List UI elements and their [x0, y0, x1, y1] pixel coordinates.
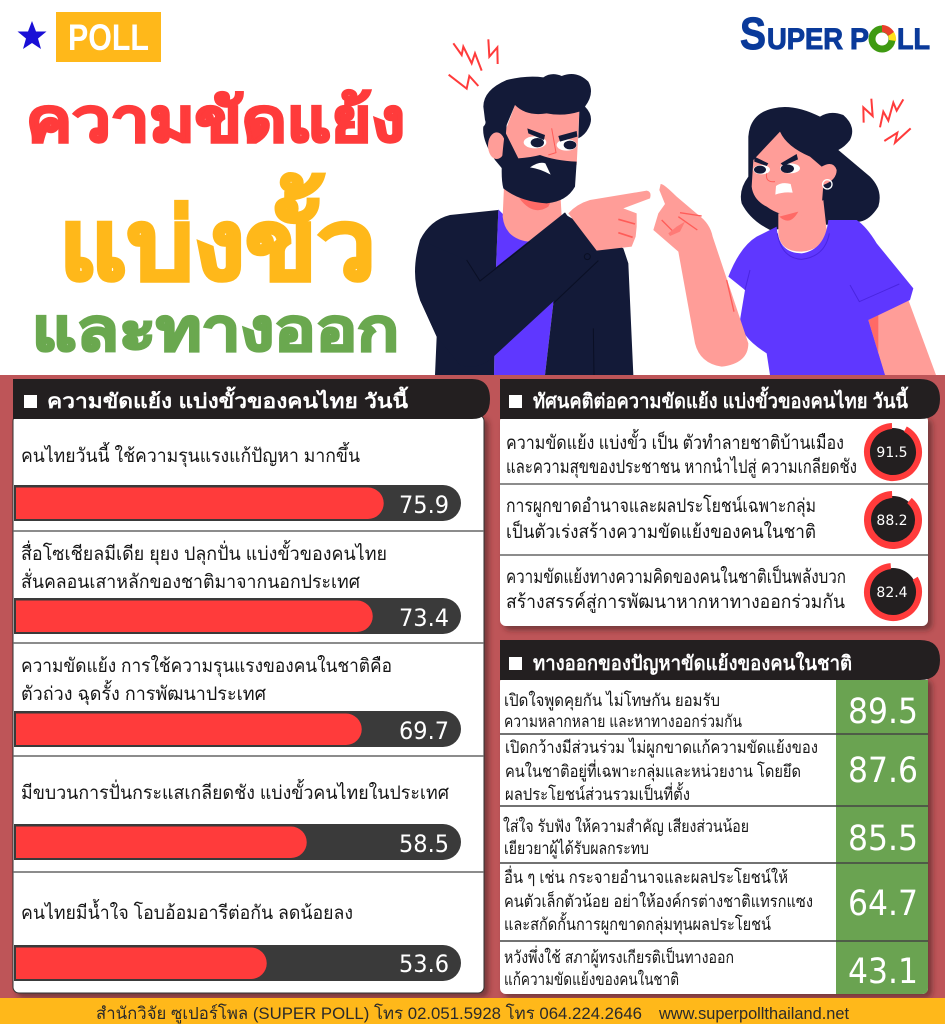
- badge: star and POLL: POLL: [68, 17, 149, 58]
- row: 43.1: แก้ความขัดแย้งของคนในชาติ: [504, 969, 679, 989]
- heading: left panel: ความขัดแย้ง แบ่งขั้วของคนไทย วันนี้: [47, 386, 409, 413]
- panel: ways out: [500, 640, 940, 994]
- row: 91.5: [506, 416, 929, 488]
- row: 88.2: การผูกขาดอำนาจและผลประโยชน์เฉพาะกลุ่ม: [506, 494, 816, 518]
- row: kindness declining 53.6: 53.6: [399, 950, 449, 978]
- row: violence 75.9: 75.9: [399, 491, 449, 519]
- title: แบ่งขั้ว: [59, 173, 376, 300]
- row: drag on development 69.7: ความขัดแย้ง การใช้ความรุนแรงของคนในชาติคือ: [21, 655, 392, 678]
- row: 64.7: และสกัดกั้นการผูกขาดกลุ่มทุนผลประโยชน์: [504, 912, 771, 935]
- title: และทางออก: [32, 298, 399, 363]
- row: 64.7: คนตัวเล็กตัวน้อย อย่าให้องค์กรต่างชาติแทรกแซง: [504, 890, 813, 911]
- row: 89.5: ความหลากหลาย และหาทางออกร่วมกัน: [504, 712, 742, 731]
- row: hate movement 58.5: มีขบวนการปั่นกระแสเกลียดชัง แบ่งขั้วคนไทยในประเทศ: [21, 779, 449, 804]
- row: kindness declining 53.6: คนไทยมีน้ำใจ โอบอ้อมอารีต่อกัน ลดน้อยลง: [21, 899, 353, 924]
- heading: ways out: ทางออกของปัญหาขัดแย้งของคนในชาติ: [533, 651, 852, 675]
- row: 89.5: [504, 690, 918, 732]
- badge: star and POLL: [18, 12, 161, 62]
- row: 87.6: 87.6: [848, 751, 918, 791]
- panel: attitudes: [500, 379, 940, 628]
- row: 87.6: คนในชาติอยู่ที่เฉพาะกลุ่มและหน่วยงาน โดยยึด: [505, 759, 801, 782]
- footer: [0, 998, 945, 1024]
- row: 85.5: 85.5: [848, 819, 918, 859]
- row: 43.1: 43.1: [848, 952, 918, 992]
- row: 87.6: ผลประโยชน์ส่วนรวมเป็นที่ตั้ง: [505, 782, 690, 804]
- row: drag on development 69.7: [14, 655, 461, 747]
- row: 88.2: [506, 484, 929, 556]
- row: social media 73.4: 73.4: [399, 604, 449, 632]
- footer: สำนักวิจัย ซูเปอร์โพล (SUPER POLL) โทร 02.051.5928 โทร 064.224.2646: [96, 1003, 642, 1024]
- row: hate movement 58.5: [14, 779, 461, 860]
- icon: man lightning bolts: [449, 39, 498, 89]
- row: 64.7: อื่น ๆ เช่น กระจายอำนาจและผลประโยชน์ให้: [504, 865, 788, 887]
- row: kindness declining 53.6: [14, 899, 461, 981]
- row: 91.5: และความสุขของประชาชน หากนำไปสู่ ความเกลียดชัง: [506, 456, 857, 479]
- row: social media 73.4: สื่อโซเชียลมีเดีย ยุยง ปลุกปั่น แบ่งขั้วของคนไทย: [21, 540, 387, 566]
- row: 43.1: หวังพึ่งใช้ สภาผู้ทรงเกียรติเป็นทางออก: [504, 945, 734, 968]
- row: drag on development 69.7: ตัวถ่วง ฉุดรั้ง การพัฒนาประเทศ: [21, 680, 266, 706]
- row: 91.5: ความขัดแย้ง แบ่งขั้ว เป็น ตัวทำลายชาติบ้านเมือง: [506, 429, 844, 454]
- heading: attitudes: ทัศนคติต่อความขัดแย้ง แบ่งขั้วของคนไทย วันนี้: [533, 386, 909, 413]
- heading: left panel: [13, 379, 490, 419]
- row: 64.7: [504, 865, 918, 935]
- row: 82.4: ความขัดแย้งทางความคิดของคนในชาติเป็นพลังบวก: [506, 564, 846, 588]
- row: 87.6: [505, 737, 918, 804]
- heading: attitudes: [500, 379, 940, 419]
- logo: Super Poll: UPER: [767, 23, 843, 56]
- logo: Super Poll: LL: [897, 23, 930, 56]
- background band: [0, 375, 945, 1000]
- row: 43.1: [504, 945, 918, 992]
- title: [26, 87, 405, 363]
- row: drag on development 69.7: 69.7: [399, 717, 449, 745]
- heading: ways out: [500, 640, 940, 680]
- row: 85.5: เยียวยาผู้ได้รับผลกระทบ: [504, 838, 649, 859]
- man figure: [415, 74, 651, 375]
- row: 88.2: เป็นตัวเร่งสร้างความขัดแย้งของคนในชาติ: [506, 519, 816, 543]
- row: 89.5: เปิดใจพูดคุยกัน ไม่โทษกัน ยอมรับ: [504, 690, 720, 711]
- logo: Super Poll: [740, 8, 930, 59]
- footer: www.superpollthailand.net: [658, 1004, 849, 1023]
- row: 64.7: 64.7: [848, 884, 918, 924]
- icon: woman lightning bolts: [863, 99, 911, 143]
- row: social media 73.4: [14, 540, 461, 634]
- panel: conflict today bars: [13, 379, 490, 993]
- row: 82.4: 82.4: [876, 585, 908, 601]
- row: violence 75.9: [14, 442, 461, 521]
- row: 85.5: ใส่ใจ รับฟัง ให้ความสำคัญ เสียงส่วนน้อย: [503, 816, 749, 836]
- row: 91.5: 91.5: [876, 445, 908, 461]
- title: ความขัดแย้ง: [26, 87, 405, 154]
- row: 85.5: [503, 816, 918, 859]
- row: social media 73.4: สั่นคลอนเสาหลักของชาติมาจากนอกประเทศ: [21, 568, 360, 593]
- row: 89.5: 89.5: [848, 692, 918, 732]
- illustration: arguing couple: [415, 39, 936, 375]
- logo: Super Poll: S: [740, 8, 766, 59]
- row: 82.4: [506, 556, 929, 628]
- row: violence 75.9: คนไทยวันนี้ ใช้ความรุนแรงแก้ปัญหา มากขึ้น: [21, 442, 360, 468]
- row: hate movement 58.5: 58.5: [399, 830, 449, 858]
- row: 82.4: สร้างสรรค์สู่การพัฒนาหากหาทางออกร่วมกัน: [506, 591, 845, 613]
- woman figure: [653, 107, 936, 375]
- row: 87.6: เปิดกว้างมีส่วนร่วม ไม่ผูกขาดแก้ความขัดแย้งของ: [505, 737, 818, 758]
- row: 88.2: 88.2: [876, 513, 908, 529]
- logo: Super Poll: P: [850, 23, 869, 56]
